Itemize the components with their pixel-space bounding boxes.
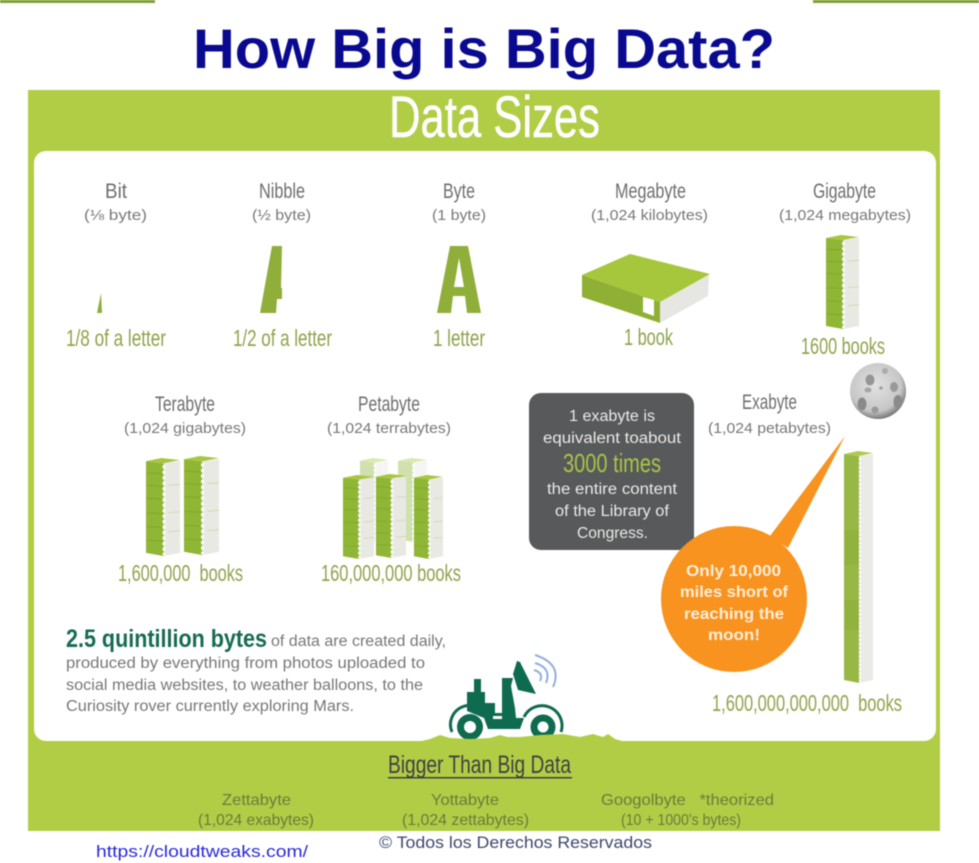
item: Yottabyte: (1,024 zettabytes) xyxy=(402,812,529,829)
item: Zettabyte xyxy=(198,792,314,829)
heading: Bigger Than Big Data: Bigger Than Big Data xyxy=(388,751,571,779)
copyright text: © Todos los Derechos Reservados xyxy=(379,833,652,852)
callout: exabyte library comparison: equivalent toabout xyxy=(543,430,682,447)
icon: five book stacks xyxy=(343,458,443,559)
item: Exabyte: (1,024 petabytes) xyxy=(708,420,831,437)
ground bump xyxy=(413,734,622,745)
callout: exabyte library comparison: of the Library of xyxy=(555,503,670,520)
item: Petabyte: (1,024 terrabytes) xyxy=(327,420,451,437)
callout: exabyte library comparison: 3000 times xyxy=(563,448,661,478)
callout: exabyte library comparison: the entire content xyxy=(547,481,678,498)
item: Bit: (⅛ byte) xyxy=(84,207,147,224)
item: Exabyte xyxy=(708,391,902,716)
callout: orange moon speech bubble xyxy=(661,436,845,672)
item: Exabyte: 1,600,000,000,000 books xyxy=(712,690,902,716)
top corner accent left xyxy=(0,0,155,3)
icon: two book stacks xyxy=(146,456,219,556)
item: Exabyte: Exabyte xyxy=(742,391,797,414)
callout: exabyte library comparison: Congress. xyxy=(577,525,648,542)
item: Byte xyxy=(432,180,486,351)
item: Megabyte: Megabyte xyxy=(615,180,686,203)
source link text: https://cloudtweaks.com/ xyxy=(96,842,308,861)
text block: 2.5 quintillion bytes: Curiosity rover currently exploring Mars. xyxy=(66,698,354,715)
item: Megabyte: 1 book xyxy=(624,324,673,350)
item: Zettabyte: (1,024 exabytes) xyxy=(198,812,314,829)
item: Zettabyte: Zettabyte xyxy=(222,792,291,809)
icon: book stack xyxy=(826,235,859,329)
title: How Big is Big Data? xyxy=(193,17,775,80)
text block: 2.5 quintillion bytes: social media websites, to weather balloons, to the xyxy=(66,677,423,694)
item: Petabyte: Petabyte xyxy=(358,393,420,416)
item: Megabyte: (1,024 kilobytes) xyxy=(591,207,708,224)
callout: exabyte library comparison xyxy=(529,393,694,550)
item: Yottabyte: Yottabyte xyxy=(431,792,499,809)
item: Terabyte: 1,600,000 books xyxy=(118,560,243,586)
item: Googolbyte: (10 + 1000's bytes) xyxy=(621,812,741,829)
text block: 2.5 quintillion bytes: of data are created daily, xyxy=(271,633,446,650)
callout: orange moon speech bubble: Only 10,000 xyxy=(686,563,781,580)
item: Petabyte xyxy=(321,393,461,586)
callout: orange moon speech bubble: miles short of xyxy=(680,584,789,601)
item: Gigabyte: 1600 books xyxy=(801,333,885,359)
panel: white content card xyxy=(34,151,936,741)
item: Byte: 1 letter xyxy=(433,325,485,351)
item: Bit xyxy=(66,180,166,351)
item: Byte: Byte xyxy=(443,180,475,203)
item: Bit: Bit xyxy=(105,180,127,203)
item: Bit: 1/8 of a letter xyxy=(66,325,166,351)
item: Gigabyte: (1,024 megabytes) xyxy=(779,207,911,224)
item: Nibble: (½ byte) xyxy=(252,207,311,224)
item: Terabyte: Terabyte xyxy=(155,393,215,416)
item: Terabyte xyxy=(118,393,246,586)
panel: green infographic background xyxy=(28,90,940,831)
icon: moon xyxy=(850,363,906,419)
text block: 2.5 quintillion bytes xyxy=(66,625,446,715)
text block: 2.5 quintillion bytes: produced by everything from photos uploaded to xyxy=(66,655,425,672)
item: Nibble: Nibble xyxy=(259,180,305,203)
icon: book xyxy=(582,254,710,323)
icon: rover xyxy=(450,655,562,736)
item: Nibble xyxy=(233,180,332,351)
item: Nibble: 1/2 of a letter xyxy=(233,325,332,351)
item: Gigabyte: Gigabyte xyxy=(813,180,876,203)
callout: orange moon speech bubble: reaching the xyxy=(684,606,784,623)
item: Megabyte xyxy=(582,180,710,350)
top corner accent right xyxy=(813,0,979,3)
callout: exabyte library comparison: 1 exabyte is xyxy=(569,408,655,425)
item: Petabyte: 160,000,000 books xyxy=(321,560,461,586)
item: Googolbyte xyxy=(601,792,774,829)
item: Gigabyte xyxy=(779,180,911,359)
icon: tall book stack xyxy=(844,451,873,683)
item: Terabyte: (1,024 gigabytes) xyxy=(124,420,246,437)
icon: signal waves xyxy=(534,655,556,687)
text block: 2.5 quintillion bytes: 2.5 quintillion bytes xyxy=(66,625,267,653)
item: Googolbyte: Googolbyte *theorized xyxy=(601,792,774,809)
callout: orange moon speech bubble: moon! xyxy=(708,627,760,644)
heading: Data Sizes: Data Sizes xyxy=(389,85,600,150)
item: Yottabyte xyxy=(402,792,529,829)
item: Byte: (1 byte) xyxy=(432,207,486,224)
